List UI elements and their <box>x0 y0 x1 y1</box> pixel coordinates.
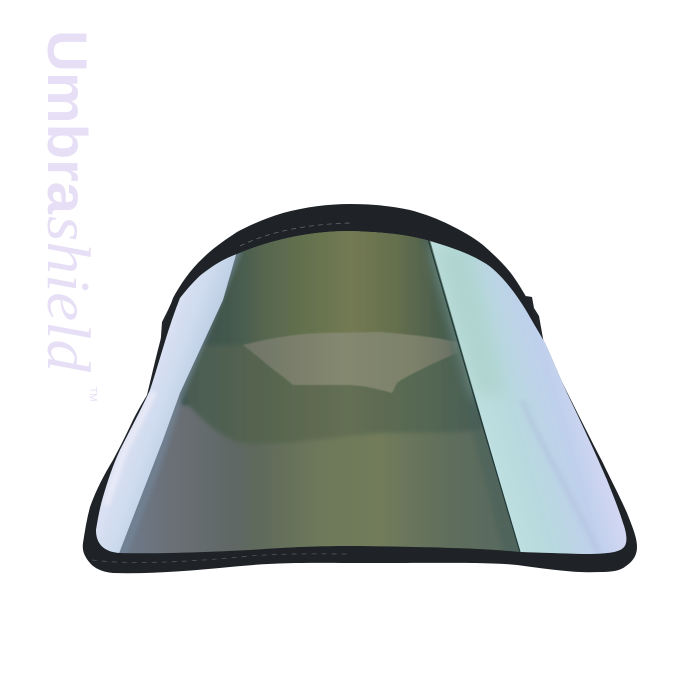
lens: lower tint base <box>90 225 630 560</box>
lens: right iridescent stripe <box>430 240 640 560</box>
strap clip: right <box>526 296 544 344</box>
stitching: bottom <box>92 554 350 563</box>
strap clip: left <box>160 297 180 350</box>
lens: dark band at seam <box>448 340 510 550</box>
lens: reflection patch <box>243 332 457 393</box>
lens: right stripe crease <box>522 400 598 552</box>
stitching: top <box>240 223 350 246</box>
visor <box>80 204 640 573</box>
lens: seam line <box>428 239 520 552</box>
lens: right stripe upper tint <box>432 245 505 395</box>
lens <box>96 231 626 554</box>
black binding outline <box>83 204 637 573</box>
product illustration canvas <box>48 34 637 574</box>
trademark mark: TM <box>87 387 98 401</box>
lens: left rim highlight <box>106 392 154 505</box>
lens: dome shadow <box>170 345 490 444</box>
lens: upper tint <box>180 231 460 406</box>
lens: left stripe soft edge <box>122 250 238 556</box>
wordmark part: Umbra: Umbra <box>36 30 99 215</box>
wordmark part: shield: shield <box>34 216 101 373</box>
brand wordmark: Umbrashield <box>34 30 101 401</box>
lens: left iridescent stripe <box>96 254 236 553</box>
